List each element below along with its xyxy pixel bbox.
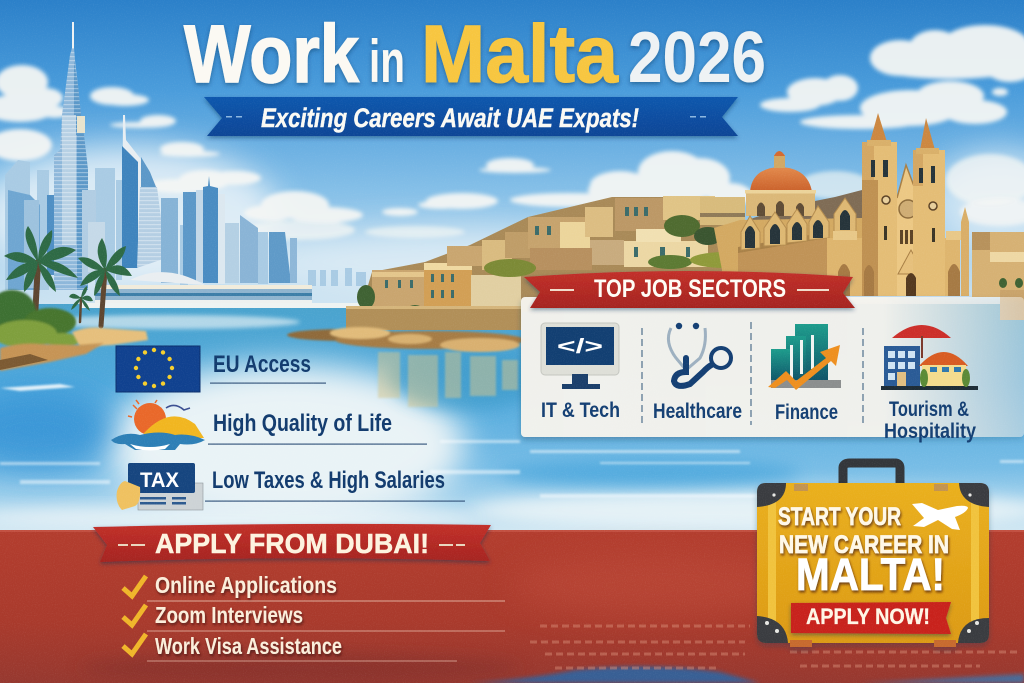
apply now ribbon (791, 602, 951, 634)
water streaks (0, 440, 1024, 498)
dome (745, 151, 816, 216)
distant towers (5, 160, 366, 290)
portal doors (838, 264, 960, 296)
apply from Dubai section (93, 524, 505, 662)
panel: top job sectors (521, 271, 1024, 443)
sector: IT and Tech (541, 323, 620, 422)
item: Online Applications: Online Applications (155, 572, 337, 598)
coastal rocks (287, 327, 525, 352)
cloud group right (760, 25, 1024, 226)
side buttress and spire (961, 207, 969, 296)
sector: Tourism and Hospitality (881, 325, 978, 443)
item: Online Applications (123, 572, 505, 602)
bushes (0, 290, 80, 348)
benefit: Low Taxes & High Salaries: Low Taxes & High Salaries (212, 467, 445, 494)
nave roof (735, 190, 862, 232)
clouds (0, 25, 1024, 240)
right town buildings (972, 232, 1024, 320)
cloud group left (0, 65, 363, 240)
central gable (897, 165, 924, 296)
sector: Tourism and Hospitality: Hospitality (884, 420, 976, 443)
sea wall (346, 307, 522, 330)
ribbon heading (93, 524, 491, 562)
item: Zoom Interviews: Zoom Interviews (155, 602, 303, 628)
trees (357, 215, 760, 327)
sector: Healthcare: Healthcare (653, 400, 742, 423)
tower right (913, 118, 945, 296)
benefit: High Quality of Life (111, 400, 427, 450)
icon: hotel and parasol (881, 325, 978, 390)
town reflections (378, 352, 518, 407)
Maltese town on the hill (287, 196, 760, 352)
call to action text: START YOUR (778, 503, 901, 531)
benefit: EU Access: EU Access (213, 351, 311, 378)
icon: stethoscope (668, 323, 731, 386)
sea (0, 303, 1024, 532)
ribbon heading: APPLY FROM DUBAI! (155, 528, 429, 559)
Burj tower (54, 22, 105, 290)
latches (794, 484, 948, 491)
sector: Tourism and Hospitality: Tourism & (889, 398, 969, 421)
ribbon heading: TOP JOB SECTORS (594, 275, 786, 303)
buildings (372, 196, 745, 308)
cloud group centre (365, 151, 752, 238)
subtitle ribbon (204, 97, 738, 136)
nave wall (714, 218, 862, 296)
palm fronds (4, 226, 132, 311)
sail tower (122, 115, 178, 283)
icon: tax document in hand: TAX (140, 469, 179, 492)
benefit: High Quality of Life: High Quality of Life (213, 410, 392, 437)
windows (385, 207, 690, 298)
benefits list (111, 346, 465, 510)
item: Work Visa Assistance (123, 633, 457, 662)
icon: EU flag (116, 346, 200, 392)
benefit: EU Access (116, 346, 326, 392)
tower left (862, 113, 897, 296)
palm trunks (35, 262, 105, 326)
call to action text: NEW CAREER IN (779, 531, 949, 559)
background: sky (0, 0, 1024, 320)
ribbon heading (524, 271, 855, 308)
subtitle ribbon: Exciting Careers Await UAE Expats! (261, 103, 639, 133)
nave gables (741, 198, 856, 250)
dividers (642, 322, 863, 425)
icon: monitor with code: </> (557, 336, 603, 358)
suitcase body (757, 483, 989, 647)
title: Malta (421, 9, 619, 100)
title: 2026 (628, 18, 766, 98)
title: in (369, 28, 405, 95)
sector: IT and Tech: IT & Tech (541, 399, 620, 422)
panel background (521, 297, 1024, 437)
nave arches (745, 210, 850, 248)
item: Work Visa Assistance: Work Visa Assistance (155, 633, 342, 659)
sector: Finance: Finance (775, 401, 838, 424)
suitcase call to action (757, 463, 989, 647)
item: Zoom Interviews (123, 602, 505, 632)
red ground (0, 530, 1024, 683)
left shore with palms (0, 226, 148, 371)
icon: airplane (912, 503, 968, 530)
skyline of Dubai (5, 22, 366, 305)
icon: tax document in hand (117, 463, 203, 510)
icon: sun over island (111, 400, 205, 450)
low waterfront building (95, 272, 312, 305)
basilica with dome (714, 113, 1024, 320)
sector: Finance (768, 324, 841, 424)
benefit: Low Taxes & High Salaries (117, 463, 465, 510)
icon: chart with rising arrow (768, 324, 841, 390)
twin towers (183, 176, 297, 284)
title: Work (184, 9, 359, 100)
title (184, 9, 766, 100)
apply now ribbon: APPLY NOW! (806, 604, 930, 629)
lower facade and balustrade (827, 231, 962, 296)
hillside (360, 197, 760, 312)
sector: Healthcare (653, 323, 742, 423)
call to action text (778, 503, 949, 600)
check list (123, 572, 505, 662)
track streaks (530, 626, 1020, 668)
left tower (8, 190, 57, 290)
sand and rocks (72, 328, 148, 347)
corners (757, 483, 989, 643)
call to action text: MALTA! (796, 549, 945, 600)
handle (843, 463, 900, 486)
